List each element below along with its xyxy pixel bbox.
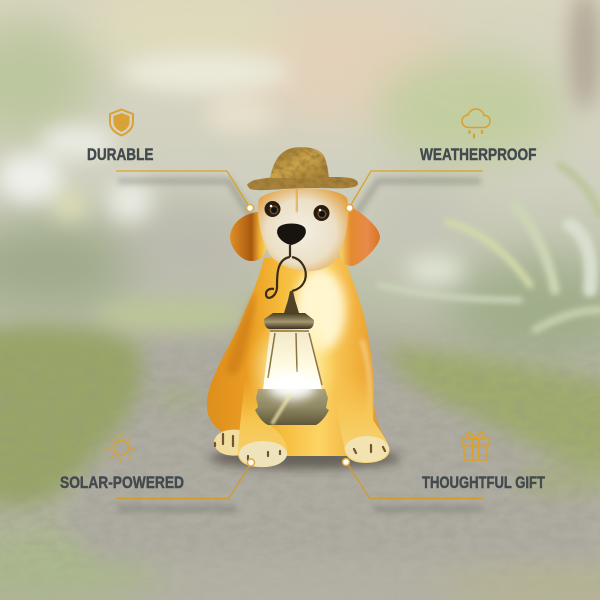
lantern base [255, 389, 329, 425]
lantern glow [246, 316, 338, 420]
ground path [60, 340, 600, 560]
lantern frame bars [268, 331, 322, 385]
connector dot [246, 204, 254, 212]
ground texture [36, 462, 478, 544]
label: weatherproof: WEATHERPROOF [420, 145, 536, 164]
dog body [207, 258, 388, 456]
left eye [264, 201, 280, 217]
moss banks [0, 301, 600, 506]
nose [277, 224, 306, 245]
hat brim [247, 177, 358, 190]
label: durable: DURABLE [87, 145, 154, 164]
head [258, 188, 348, 271]
label: thoughtful gift: THOUGHTFUL GIFT [422, 473, 545, 492]
callout: weatherproof [346, 109, 536, 212]
icon: shield [110, 110, 133, 136]
ground shadow under dog [209, 447, 401, 469]
forehead stripe [296, 188, 298, 212]
lantern light flare [268, 372, 316, 400]
lantern glass [263, 331, 322, 390]
front right leg and paw [334, 370, 390, 463]
connector line [349, 171, 483, 208]
hat crown [270, 147, 329, 178]
line shadows [118, 181, 483, 509]
label: solar-powered: SOLAR-POWERED [60, 473, 184, 492]
rear left paw [214, 430, 243, 456]
lantern cap [264, 313, 314, 329]
paw claws [215, 434, 385, 460]
right flank highlight [362, 340, 370, 425]
callout: thoughtful gift [342, 433, 545, 498]
hat texture [247, 147, 358, 190]
front left leg and paw [238, 375, 287, 467]
icon: cloud with rain [462, 109, 490, 138]
connector dot [346, 204, 353, 212]
right ear [339, 204, 380, 266]
icon: sun [106, 434, 136, 462]
left shoulder shade [226, 290, 255, 375]
connector dot [342, 458, 350, 466]
left ear [230, 212, 267, 261]
icon: gift box [462, 433, 489, 460]
right eye [314, 205, 330, 221]
callout: solar-powered [60, 434, 254, 498]
connector line [346, 462, 483, 498]
dog and lantern figure [207, 147, 401, 469]
connector line [116, 463, 251, 498]
connector line [116, 171, 250, 208]
lantern finial [284, 291, 299, 313]
connector dot [248, 459, 254, 466]
flare streak [272, 395, 290, 424]
chest highlight [294, 268, 346, 352]
callout: durable [87, 110, 254, 212]
mouth and hook [266, 245, 306, 298]
